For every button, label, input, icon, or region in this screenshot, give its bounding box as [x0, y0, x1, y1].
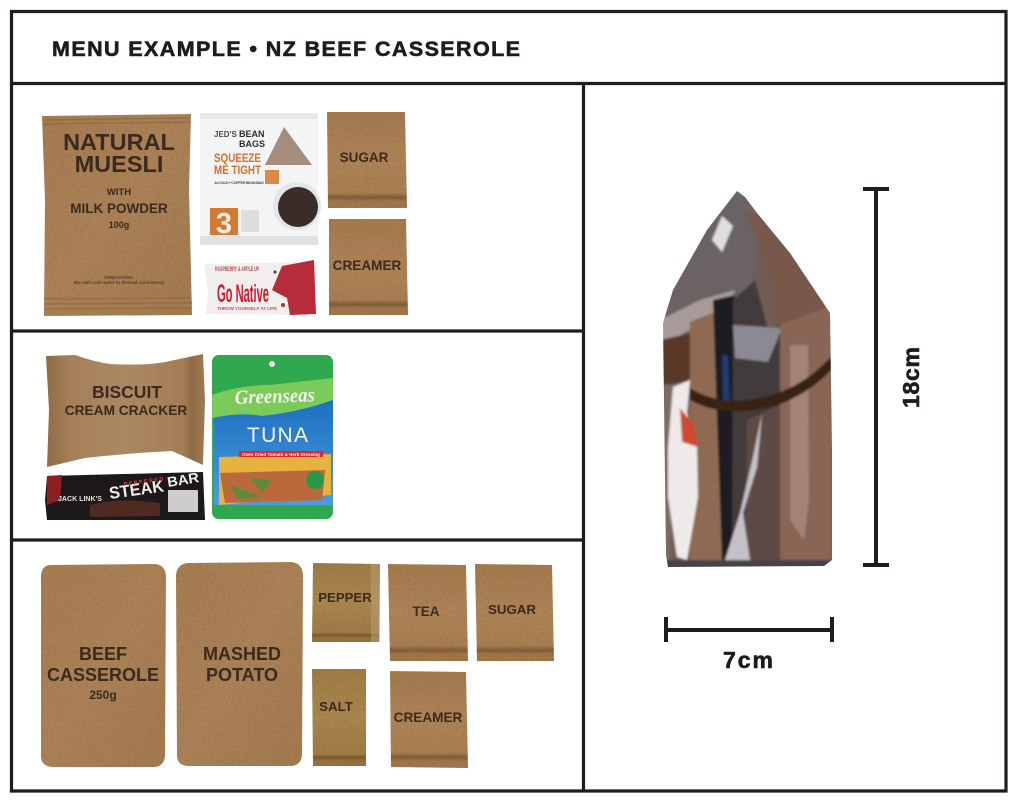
item: salt sachet	[312, 669, 366, 766]
item: natural muesli pouch: NATURAL	[63, 129, 175, 155]
item: beef casserole pouch	[41, 564, 166, 767]
item: coffee bean bag: ME TIGHT	[214, 163, 262, 177]
item: natural muesli pouch: Mix with cold water to desired consistency	[73, 280, 165, 285]
item: tuna pouch: TUNA	[247, 424, 308, 447]
item: sugar sachet	[475, 564, 554, 661]
item: creamer sachet: CREAMER	[394, 710, 463, 725]
item: coffee bean bag: JED'S	[214, 130, 237, 139]
item: mashed potato pouch: POTATO	[206, 665, 278, 685]
item: pepper sachet	[312, 563, 380, 642]
height label: 18cm	[898, 347, 924, 408]
item: tea sachet: TEA	[412, 604, 440, 619]
item: natural muesli pouch: 100g	[109, 220, 129, 230]
item: pepper sachet: PEPPER	[318, 590, 372, 605]
item: coffee bean bag	[200, 113, 321, 245]
item: creamer sachet: CREAMER	[333, 258, 402, 273]
item: beef casserole pouch: CASSEROLE	[47, 665, 159, 685]
item: coffee bean bag: BAGS	[239, 139, 265, 149]
item: mashed potato pouch: MASHED	[203, 644, 281, 664]
item: go native bar	[204, 260, 316, 315]
width label: 7cm	[723, 647, 773, 673]
item: natural muesli pouch: DIRECTIONS:	[104, 275, 134, 280]
item: steak bar	[45, 469, 205, 520]
dimension: width 7cm	[665, 617, 832, 673]
item: natural muesli pouch	[42, 114, 192, 316]
item: steak bar: STEAK	[108, 476, 166, 503]
item: tuna pouch: Greenseas	[234, 384, 315, 409]
title: MENU EXAMPLE • NZ BEEF CASSEROLE	[52, 37, 520, 61]
item: mashed potato pouch	[176, 562, 303, 766]
item: coffee bean bag: BEAN	[239, 129, 265, 139]
item: sugar sachet: SUGAR	[340, 150, 389, 165]
item: coffee bean bag: 3	[216, 208, 232, 240]
item: creamer sachet	[329, 219, 408, 315]
item: steak bar: JACK LINK'S	[58, 496, 102, 503]
item: biscuit pack: BISCUIT	[92, 382, 162, 402]
item: go native bar: RASPBERRY & APPLE UP	[215, 267, 259, 273]
item: go native bar: THROW YOURSELF AT LIFE	[217, 306, 277, 311]
item: natural muesli pouch: WITH	[107, 187, 131, 198]
item: natural muesli pouch: MILK POWDER	[70, 201, 168, 216]
item: tuna pouch: Oven Dried Tomato & Herb Dressing	[242, 452, 320, 457]
item: steak bar: PEPPERED	[123, 476, 164, 488]
panel: lunch	[45, 354, 333, 520]
item: biscuit pack	[46, 354, 205, 467]
item: coffee bean bag: SQUEEZE	[214, 151, 261, 165]
item: coffee bean bag: 1x COLD + COFFEE BEAN BAG	[214, 180, 264, 185]
item: beef casserole pouch: 250g	[89, 688, 117, 702]
panel: dinner	[41, 562, 554, 768]
item: sugar sachet: SUGAR	[488, 602, 536, 617]
item: beef casserole pouch: BEEF	[79, 644, 127, 664]
item: natural muesli pouch: MUESLI	[75, 151, 163, 177]
dimension: height 18cm	[863, 189, 924, 566]
item: salt sachet: SALT	[319, 699, 353, 714]
panel: breakfast	[42, 112, 408, 316]
item: creamer sachet	[390, 671, 468, 768]
item: go native bar: Go Native	[217, 280, 269, 308]
ration bag photo	[660, 188, 835, 570]
item: steak bar: BAR	[166, 469, 200, 490]
item: tuna pouch	[212, 355, 333, 519]
item: sugar sachet	[327, 112, 407, 208]
item: biscuit pack: CREAM CRACKER	[65, 403, 187, 418]
item: tea sachet	[388, 564, 468, 661]
